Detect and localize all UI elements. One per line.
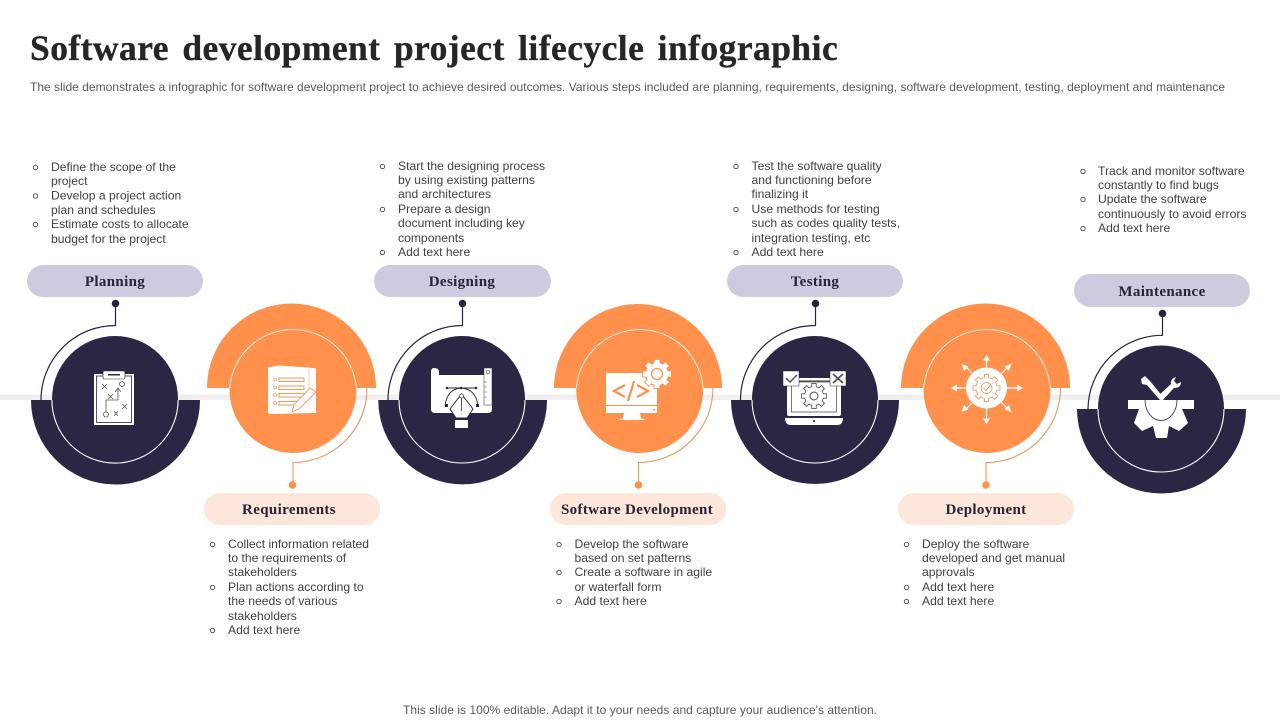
pill: Maintenance (1074, 274, 1250, 307)
list: Maintenance: continuously to avoid errors (1098, 207, 1246, 221)
step: Requirements text (204, 493, 380, 637)
list: Designing: by using existing patterns (398, 173, 535, 187)
step: Requirements (207, 304, 376, 489)
step: Deployment (898, 304, 1074, 608)
list: Software Development (557, 537, 712, 608)
list: Designing: document including key (398, 216, 526, 230)
list: Deployment: Deploy the software (922, 537, 1030, 551)
pill: Maintenance: Maintenance (1118, 284, 1206, 300)
list: Planning: budget for the project (51, 232, 166, 246)
pill: Testing: Testing (791, 274, 839, 290)
icon: half gear with tools (1128, 376, 1194, 438)
pill: Software Development: Software Development (561, 502, 713, 518)
list: Requirements: stakeholders (228, 609, 297, 623)
list: Software Development: based on set patterns (574, 551, 691, 565)
list: Planning: Develop a project action (51, 188, 181, 202)
list: Testing: such as codes quality tests, (752, 216, 900, 230)
list: Designing: Add text here (398, 245, 470, 259)
pill: Testing (727, 265, 903, 297)
dial: Maintenance (1077, 346, 1246, 494)
connector: Testing (740, 300, 819, 400)
icon: gear with arrows (951, 355, 1023, 424)
subtitle: The slide demonstrates a infographic for software development project to achieve desired outcomes. Various steps included are planning, requirements, designing, software development, testing, deployment and maintenance (30, 80, 1225, 94)
dial: Requirements (207, 304, 376, 453)
list: Deployment (904, 537, 1065, 608)
list: Designing: components (398, 231, 464, 245)
list: Requirements: Plan actions according to (228, 580, 364, 594)
dial: Deployment (901, 304, 1070, 453)
list: Testing: finalizing it (752, 187, 809, 201)
list: Requirements: Add text here (228, 623, 300, 637)
list: Testing: integration testing, etc (752, 231, 870, 245)
pill: Planning (27, 265, 203, 297)
pill: Requirements: Requirements (242, 502, 336, 518)
list: Deployment: Add text here (922, 594, 994, 608)
title: Software development project lifecycle infographic (30, 28, 838, 68)
connector: Requirements (289, 388, 367, 489)
icon: clipboard (94, 371, 134, 425)
list: Planning: project (51, 174, 88, 188)
connector: Deployment (982, 388, 1060, 489)
list: Designing (380, 159, 545, 259)
list: Planning (33, 160, 189, 246)
list: Planning: Estimate costs to allocate (51, 217, 189, 231)
connector: Planning (41, 300, 119, 400)
list: Testing: Add text here (752, 245, 824, 259)
list: Designing: Start the designing process (398, 159, 545, 173)
icon: monitor and gear (606, 360, 672, 420)
pill: Deployment (898, 493, 1074, 525)
list: Maintenance: constantly to find bugs (1098, 178, 1219, 192)
dial: Testing (731, 336, 899, 484)
list: Requirements: to the requirements of (228, 551, 347, 565)
list: Testing (734, 159, 900, 259)
list: Requirements: Collect information related (228, 537, 369, 551)
list: Deployment: approvals (922, 565, 975, 579)
dial: Planning (31, 336, 200, 484)
list: Planning: plan and schedules (51, 203, 156, 217)
list: Requirements: the needs of various (228, 594, 337, 608)
list: Designing: and architectures (398, 187, 491, 201)
step: Planning (27, 160, 203, 484)
list: Testing: Use methods for testing (752, 202, 880, 216)
step: Software Development (550, 304, 726, 608)
list: Testing: Test the software quality (752, 159, 883, 173)
connector: Designing (388, 300, 466, 400)
step: Testing (727, 159, 903, 484)
list: Software Development: Add text here (574, 594, 647, 608)
icon: blueprint and pen nib (431, 368, 492, 428)
list: Testing: and functioning before (752, 173, 872, 187)
pill: Requirements (204, 493, 380, 525)
list: Requirements (210, 537, 369, 637)
icon: document and pencil (268, 366, 316, 414)
list: Software Development: Develop the software (574, 537, 689, 551)
pill: Planning: Planning (85, 274, 145, 290)
step: Maintenance (1074, 164, 1250, 494)
step: Designing (374, 159, 551, 484)
list: Designing: Prepare a design (398, 202, 490, 216)
list: Deployment: Add text here (922, 580, 994, 594)
list: Software Development: Create a software in agile (574, 565, 712, 579)
pill: Designing: Designing (429, 274, 495, 290)
pill: Software Development (550, 493, 726, 525)
list: Deployment: developed and get manual (922, 551, 1065, 565)
connector: Software Development (635, 388, 713, 489)
pill: Deployment: Deployment (946, 502, 1026, 518)
dial: Designing (378, 336, 547, 484)
connector: Maintenance (1088, 310, 1166, 409)
background band (0, 394, 1280, 400)
list: Software Development: or waterfall form (574, 580, 662, 594)
list: Maintenance: Add text here (1098, 221, 1170, 235)
dial: Software Development (554, 304, 722, 453)
pill: Designing (374, 265, 551, 297)
list: Maintenance (1081, 164, 1246, 235)
list: Maintenance: Update the software (1098, 192, 1207, 206)
icon: laptop with gear (783, 371, 846, 425)
list: Planning: Define the scope of the (51, 160, 176, 174)
footer note: This slide is 100% editable. Adapt it to your needs and capture your audience's attention. (403, 703, 877, 717)
list: Maintenance: Track and monitor software (1098, 164, 1245, 178)
list: Requirements: stakeholders (228, 565, 297, 579)
